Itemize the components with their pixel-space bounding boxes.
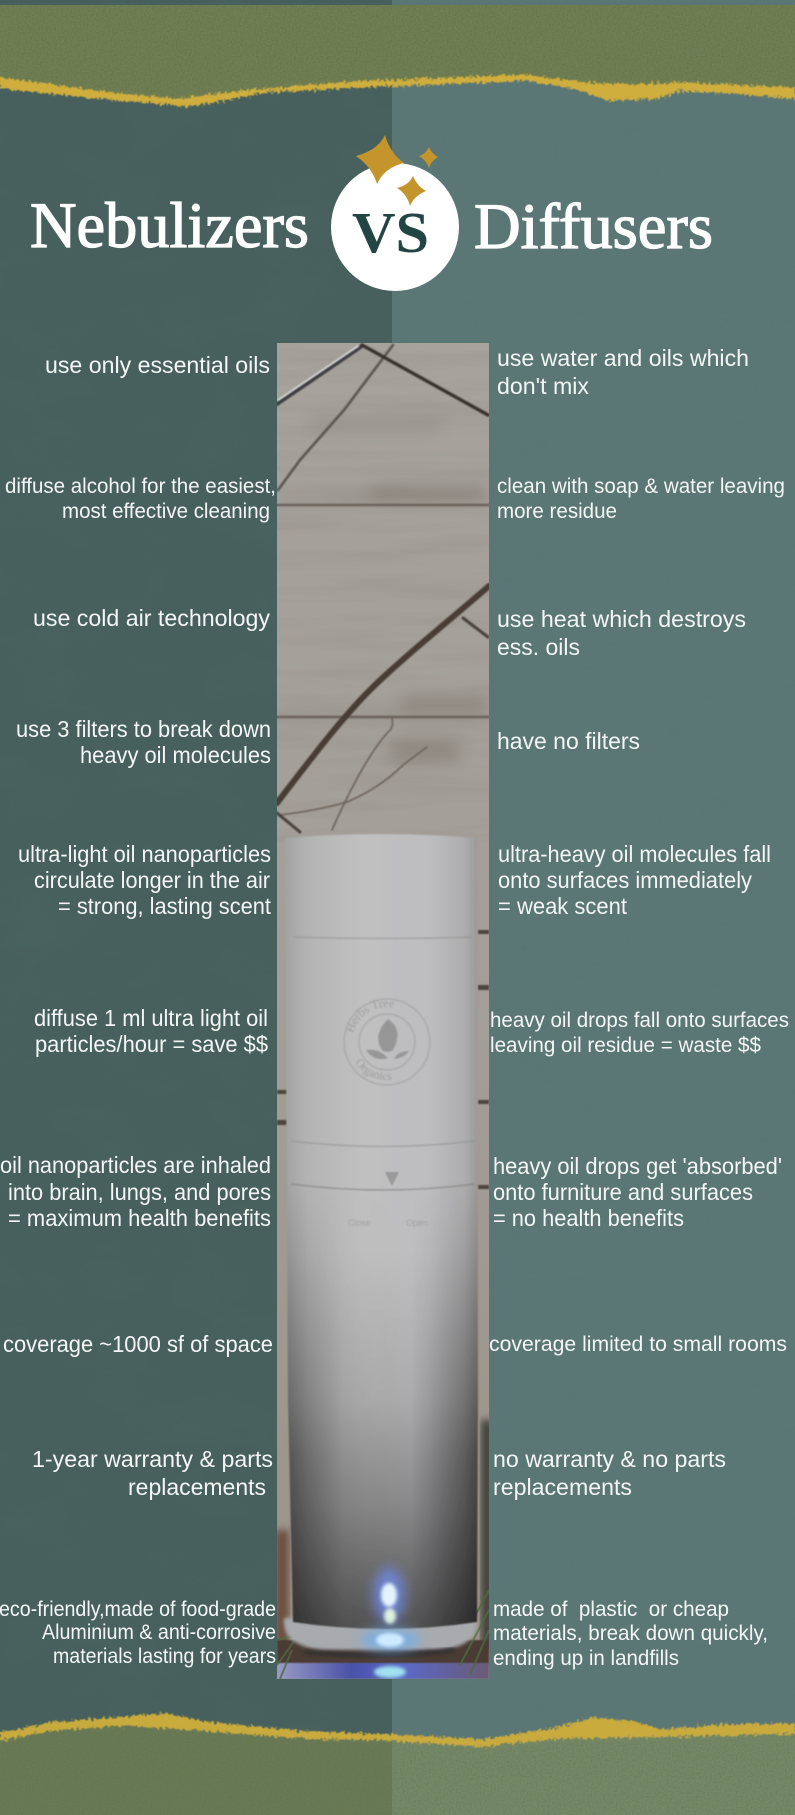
right column row 10: made of plastic or cheap [493, 1597, 729, 1621]
right column row 10: ending up in landfills [493, 1646, 679, 1670]
diffuser seam lines [291, 937, 474, 1190]
left column row 6: diffuse 1 ml ultra light oil [34, 1005, 268, 1031]
right column row 5: ultra-heavy oil molecules fall [498, 841, 771, 867]
diffuser cylinder body [285, 834, 478, 1629]
close open label on device: Close Open [348, 1218, 428, 1228]
bottom gold torn edge [0, 1714, 795, 1746]
title: Diffusers: Diffusers [474, 191, 713, 263]
left column row 2: diffuse alcohol for the easiest, [5, 474, 276, 498]
left column row 10: materials lasting for years [53, 1644, 276, 1668]
title: Nebulizers: Nebulizers [30, 190, 309, 262]
icon: down triangle marker [385, 1172, 399, 1186]
left column row 7: into brain, lungs, and pores [8, 1179, 271, 1205]
right column row 2: clean with soap & water leaving [497, 474, 785, 498]
left column row 5: circulate longer in the air [34, 867, 270, 893]
right column row 3: ess. oils [497, 634, 580, 660]
top olive torn paper band [0, 5, 795, 106]
right column row 1 [497, 345, 749, 399]
right column row 10: materials, break down quickly, [493, 1621, 768, 1645]
background: diffusers light teal right half [392, 0, 795, 1815]
left column row 7 [0, 1152, 271, 1231]
right column row 7: heavy oil drops get 'absorbed' [493, 1153, 782, 1179]
left column row 6: particles/hour = save $$ [35, 1031, 268, 1057]
lower side shadows of the background [275, 1530, 289, 1650]
table and floor [277, 1640, 489, 1664]
logo: round leaf emblem: Organics [356, 1059, 392, 1080]
icon: large gold star [356, 135, 404, 184]
right column row 1: use water and oils which [497, 345, 749, 371]
photo: nebulizer diffuser device against wood wall [277, 343, 489, 1679]
left column row 5: = strong, lasting scent [58, 893, 272, 919]
left column row 4: use 3 filters to break down [16, 716, 271, 742]
right column row 9 [493, 1446, 726, 1500]
left column row 5 [18, 841, 272, 919]
right column row 5 [498, 841, 771, 919]
left column row 4 [16, 716, 271, 768]
left column row 3: use cold air technology [33, 605, 270, 631]
wood wall [277, 343, 489, 1679]
icon: medium gold star [397, 176, 426, 206]
right column row 9: no warranty & no parts [493, 1446, 726, 1472]
white circle [331, 163, 459, 291]
right column row 4: have no filters [497, 728, 640, 754]
right column row 7: onto furniture and surfaces [493, 1179, 753, 1205]
blue leds glowing [360, 1567, 420, 1678]
icon: small gold star [419, 147, 438, 168]
right column row 2 [497, 474, 785, 523]
right column row 6 [490, 1008, 789, 1057]
left column row 9 [32, 1446, 273, 1500]
left column row 9: 1-year warranty & parts [32, 1446, 273, 1472]
right column row 10 [493, 1597, 768, 1670]
left column row 7: oil nanoparticles are inhaled [0, 1152, 271, 1178]
right column row 2: more residue [497, 499, 617, 523]
left column row 8: coverage ~1000 sf of space [3, 1331, 273, 1357]
vs badge with stars [331, 135, 459, 291]
plant leaves [277, 1590, 489, 1679]
left column row 4: heavy oil molecules [80, 742, 271, 768]
wood branches [277, 345, 489, 832]
right column row 9: replacements [493, 1474, 632, 1500]
right column row 6: heavy oil drops fall onto surfaces [490, 1008, 789, 1032]
bottom olive torn paper band [0, 1714, 795, 1815]
right column row 5: onto surfaces immediately [498, 867, 752, 893]
background: nebulizers dark teal left half [0, 0, 392, 1815]
left column row 2: most effective cleaning [62, 499, 270, 523]
left column row 10 [0, 1597, 276, 1668]
diffuser base ring [284, 1618, 476, 1650]
top gold torn edge [0, 75, 795, 106]
right column row 6: leaving oil residue = waste $$ [490, 1033, 761, 1057]
logo: round leaf emblem: Herbs Tree [346, 1001, 394, 1032]
left column row 6 [34, 1005, 268, 1057]
left column row 7: = maximum health benefits [8, 1205, 271, 1231]
vs letters: VS [352, 200, 429, 265]
right column row 3: use heat which destroys [497, 606, 746, 632]
right column row 5: = weak scent [498, 893, 628, 919]
left column row 10: Aluminium & anti-corrosive [42, 1620, 276, 1644]
right column row 8: coverage limited to small rooms [489, 1332, 787, 1356]
left column row 5: ultra-light oil nanoparticles [18, 841, 271, 867]
right column row 7 [493, 1153, 782, 1231]
right column row 7: = no health benefits [493, 1205, 684, 1231]
right column row 3 [497, 606, 746, 660]
left column row 9: replacements [128, 1474, 266, 1500]
left column row 10: eco-friendly,made of food-grade [0, 1597, 276, 1621]
right column row 1: don't mix [497, 373, 589, 399]
logo: round leaf emblem [343, 998, 431, 1086]
left column row 2 [5, 474, 276, 523]
left column row 1: use only essential oils [45, 352, 270, 378]
